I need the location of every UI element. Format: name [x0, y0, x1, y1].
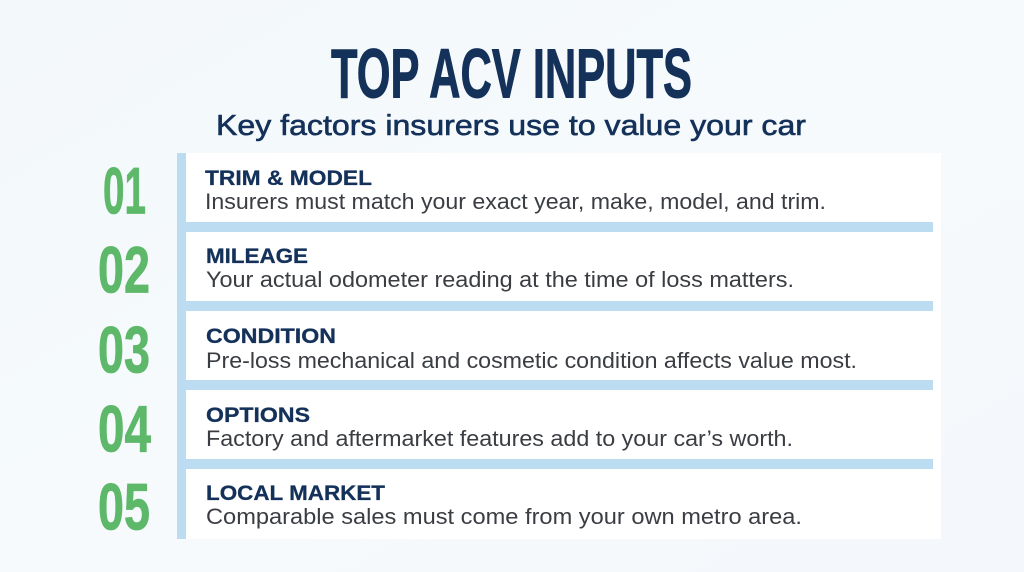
- item 05: local market: LOCAL MARKET: [206, 481, 385, 505]
- title: TOP ACV INPUTS: [331, 34, 692, 112]
- item 01: trim and model: 01: [103, 154, 146, 228]
- item 03: condition: Pre-loss mechanical and cosmetic condition affects value most.: [206, 348, 857, 373]
- item 04: options: Factory and aftermarket features add to your car’s worth.: [206, 426, 793, 451]
- item 02: mileage: MILEAGE: [206, 244, 308, 268]
- item 03: condition: 03: [98, 312, 150, 386]
- item 02: mileage: Your actual odometer reading at the time of loss matters.: [206, 267, 794, 292]
- item 03: condition: CONDITION: [206, 324, 336, 348]
- item 04: options: OPTIONS: [206, 403, 310, 427]
- item 01: trim and model: [103, 154, 826, 228]
- item 05: local market: Comparable sales must come from your own metro area.: [206, 504, 802, 529]
- item 04: options: [98, 392, 793, 466]
- item 01: trim and model: Insurers must match your exact year, make, model, and trim.: [205, 189, 826, 214]
- item 02: mileage: [98, 232, 794, 306]
- item 04: options: 04: [98, 392, 151, 466]
- item 05: local market: 05: [98, 470, 150, 544]
- item 03: condition: [98, 312, 857, 386]
- subtitle: Key factors insurers use to value your car: [216, 110, 807, 142]
- item 05: local market: [98, 470, 802, 544]
- panel: list background: [177, 153, 941, 539]
- item 02: mileage: 02: [98, 232, 150, 306]
- item 01: trim and model: TRIM & MODEL: [205, 166, 372, 190]
